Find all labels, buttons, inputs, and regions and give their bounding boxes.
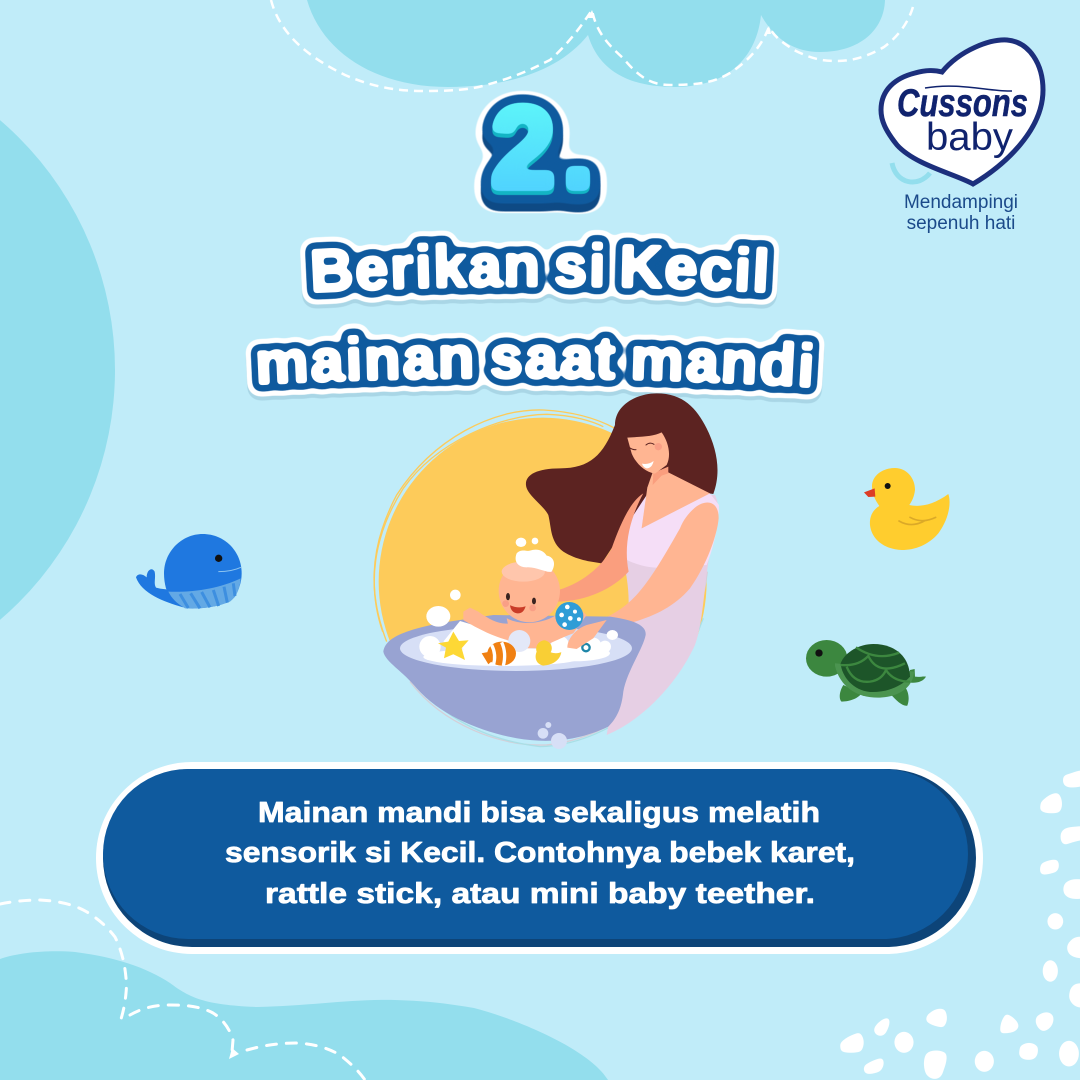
- number outline: blue: .: [562, 87, 594, 215]
- logo swoosh: [925, 86, 1012, 91]
- turtle shell pattern: [841, 647, 910, 682]
- smile: [642, 461, 654, 468]
- heading outline blue: [250, 234, 820, 395]
- ball: [555, 602, 583, 630]
- front arm: [567, 503, 719, 648]
- foam splashes: [426, 538, 618, 640]
- fish tail: [482, 652, 493, 664]
- number depth: teal: .: [562, 87, 594, 215]
- chest: [642, 472, 710, 528]
- hair: [526, 393, 718, 563]
- hand over tub: [567, 620, 607, 649]
- logo: Cussons baby: [881, 40, 1043, 234]
- cheek: [655, 443, 662, 450]
- heading shadow: [246, 258, 824, 404]
- body text: sensorik si Kecil. Contohnya bebek karet,: [225, 837, 855, 869]
- logo swirl: [892, 163, 930, 182]
- heading: Berikan si Kecil mainan saat mandi: [246, 230, 824, 404]
- logo tagline: Mendampingi: [904, 192, 1018, 213]
- number depth: teal: [491, 87, 594, 216]
- turtle: [806, 640, 926, 706]
- toy: clownfish: [482, 642, 516, 666]
- heading outline white: [246, 230, 824, 400]
- heading shadow: Berikan si Kecil: [300, 258, 779, 308]
- logo wordmark Cussons: Cussons: [897, 82, 1028, 125]
- duck body: [870, 468, 950, 550]
- heading face white: [257, 241, 813, 388]
- tub inner: [400, 626, 632, 671]
- number outline: blue: [491, 86, 594, 215]
- duck wing: [899, 517, 936, 525]
- turtle eye: [815, 649, 823, 657]
- toy: small duck: [536, 640, 561, 666]
- number face: cyan: [491, 84, 594, 212]
- turtle shell rim: [835, 663, 914, 698]
- duck eye: [885, 483, 891, 489]
- number face: cyan: 2: [491, 84, 555, 212]
- rubber duck: [864, 468, 950, 550]
- turtle legs: [840, 669, 926, 706]
- heading face white: mainan saat mandi: [257, 334, 813, 388]
- whale body: [164, 534, 242, 608]
- logo tagline: sepenuh hati: [907, 213, 1015, 234]
- baby body: [507, 607, 587, 648]
- decorative white dots: bottom right: [840, 770, 1080, 1079]
- baby arm: [463, 608, 517, 642]
- number outline: dark blue extrusion: .: [562, 95, 594, 223]
- whale belly stripes: [180, 583, 235, 608]
- pill face: [103, 769, 968, 939]
- baby cheeks: [502, 600, 536, 611]
- heading face white: Berikan si Kecil: [312, 241, 768, 294]
- body text: rattle stick, atau mini baby teether.: [265, 878, 815, 910]
- sketch rings: [374, 410, 707, 747]
- dashed path: bottom left: [0, 900, 365, 1080]
- background shape: bottom left wave: [0, 951, 608, 1080]
- pill white border: [96, 762, 983, 954]
- eyes: [629, 443, 654, 450]
- toy: teether ring: [582, 644, 590, 651]
- bath tub: [383, 615, 646, 741]
- heading number: 2.: [491, 84, 594, 223]
- heading shadow: mainan saat mandi: [246, 350, 824, 404]
- baby hair patch: [502, 562, 545, 582]
- body text: Mainan mandi bisa sekaligus melatih: [258, 797, 820, 829]
- illustration: mother bathing baby: [374, 393, 719, 749]
- back arm: [557, 493, 643, 602]
- heading outline blue: Berikan si Kecil: [305, 234, 774, 300]
- turtle head: [806, 640, 847, 677]
- dress: [607, 488, 719, 735]
- yellow circle: [378, 418, 707, 641]
- heading outline blue: mainan saat mandi: [250, 328, 820, 395]
- number outline: dark blue extrusion: [491, 94, 594, 223]
- number outline: white: .: [562, 90, 594, 218]
- tub bubbles: [538, 722, 567, 749]
- dashed path: top: [271, 0, 914, 91]
- number depth: teal: 2: [491, 88, 555, 216]
- fish stripes: [492, 642, 505, 666]
- toy: star: [438, 632, 469, 660]
- logo wordmark baby: baby: [926, 116, 1014, 159]
- baby mouth: [510, 605, 526, 613]
- text pill: [96, 762, 983, 954]
- foam base: [419, 621, 611, 666]
- toy: blue ball rattle: [555, 602, 583, 630]
- background cloud: top: [307, 0, 885, 87]
- whale eye: [215, 555, 222, 562]
- number face: cyan: .: [562, 84, 594, 212]
- background shape: left circle: [0, 41, 115, 699]
- ball stars: [559, 605, 581, 627]
- foam cloud light: [508, 630, 530, 652]
- pill shadow: [103, 769, 976, 947]
- duck beak: [864, 488, 875, 497]
- baby head: [499, 560, 560, 622]
- heading outline white: mainan saat mandi: [246, 323, 824, 400]
- neck shadow: [653, 467, 668, 485]
- number outline: dark blue extrusion: 2: [491, 94, 555, 222]
- baby eyes: [506, 593, 536, 604]
- number outline: blue: 2: [491, 86, 555, 214]
- whale mouth: [218, 567, 241, 572]
- heading outline white: Berikan si Kecil: [300, 230, 780, 305]
- fish body: [487, 642, 516, 666]
- dress upper: [623, 488, 719, 568]
- face: [627, 432, 669, 474]
- whale tail: [136, 569, 183, 607]
- whale: [136, 534, 242, 609]
- number outline: white: [491, 89, 594, 218]
- baby foam hair: [516, 550, 554, 572]
- number outline: white: 2: [491, 89, 555, 217]
- whale belly: [168, 578, 241, 609]
- turtle shell: [841, 644, 910, 692]
- logo heart: [881, 40, 1043, 184]
